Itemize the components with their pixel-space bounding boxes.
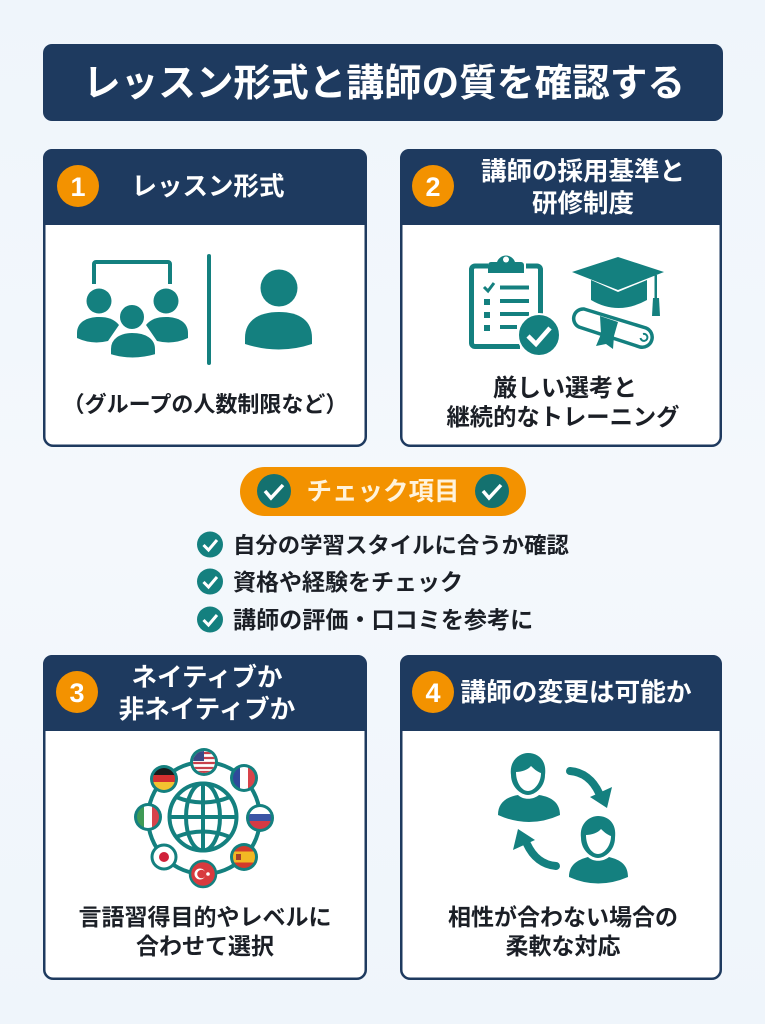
panel 1: lesson format (43, 149, 367, 446)
item 3: 講師の評価・口コミを参考に (233, 607, 533, 633)
flag: Russia (246, 804, 274, 832)
icon: clipboard checklist (472, 256, 560, 356)
panel 2: hiring standards and training (400, 149, 722, 446)
icon: group vs one-on-one (77, 254, 312, 365)
flag: Turkey (190, 861, 216, 887)
heading: native or non-native: 非ネイティブか (119, 695, 296, 724)
item 1: 自分の学習スタイルに合うか確認 (233, 533, 569, 558)
flag: Spain (230, 843, 258, 871)
icon: badge check right (475, 474, 509, 508)
title banner: レッスン形式と講師の質を確認する (83, 63, 685, 105)
number badge 2: 2 (425, 172, 441, 202)
number badge 4: 4 (425, 678, 441, 708)
heading: hiring standards: 講師の採用基準と (481, 158, 685, 186)
arrow down right (570, 771, 612, 808)
flag: France (230, 764, 258, 792)
arrow up left (513, 829, 556, 866)
caption: flexible handling: 柔軟な対応 (506, 933, 620, 959)
title banner (43, 44, 723, 121)
caption: choose by goal and level: 言語習得目的やレベルに (78, 904, 332, 930)
caption: choose by goal and level: 合わせて選択 (136, 933, 274, 959)
panel 4: can teachers be changed (400, 655, 722, 979)
checklist (197, 532, 569, 633)
badge label: チェック項目 (306, 478, 460, 506)
number badge 3 (56, 671, 98, 713)
person top (498, 753, 560, 822)
flag: Italy (134, 803, 162, 831)
caption: flexible handling: 相性が合わない場合の (448, 904, 678, 930)
person bottom (569, 816, 628, 884)
number badge 2 (412, 165, 454, 207)
checklist badge (240, 467, 526, 516)
flag: Japan (152, 845, 176, 869)
heading: hiring standards: 研修制度 (532, 190, 634, 218)
icon: swap teachers (498, 753, 628, 884)
heading: hiring standards (481, 158, 685, 218)
icon: graduation cap and diploma (572, 257, 664, 349)
flag: USA (190, 748, 218, 776)
heading: native or non-native: ネイティブか (132, 663, 283, 692)
caption: choose by goal and level (78, 904, 332, 959)
number badge 1: 1 (70, 172, 86, 202)
number badge 3: 3 (69, 678, 85, 708)
heading: teacher change: 講師の変更は可能か (460, 678, 692, 707)
icon: globe with flags (134, 748, 274, 887)
caption: flexible handling (448, 904, 678, 959)
heading: native or non-native (119, 663, 296, 724)
number badge 1 (57, 165, 99, 207)
heading: lesson format: レッスン形式 (131, 173, 285, 201)
number badge 4 (412, 671, 454, 713)
item 2: 資格や経験をチェック (233, 569, 463, 595)
caption: selection and training (447, 375, 679, 430)
icon: badge check left (257, 474, 291, 508)
caption: selection and training: 継続的なトレーニング (447, 403, 679, 430)
caption: selection and training: 厳しい選考と (493, 375, 637, 402)
flag: Germany (150, 765, 178, 793)
panel 3: native or non-native (43, 655, 367, 979)
caption: group size: （グループの人数制限など） (63, 392, 347, 417)
